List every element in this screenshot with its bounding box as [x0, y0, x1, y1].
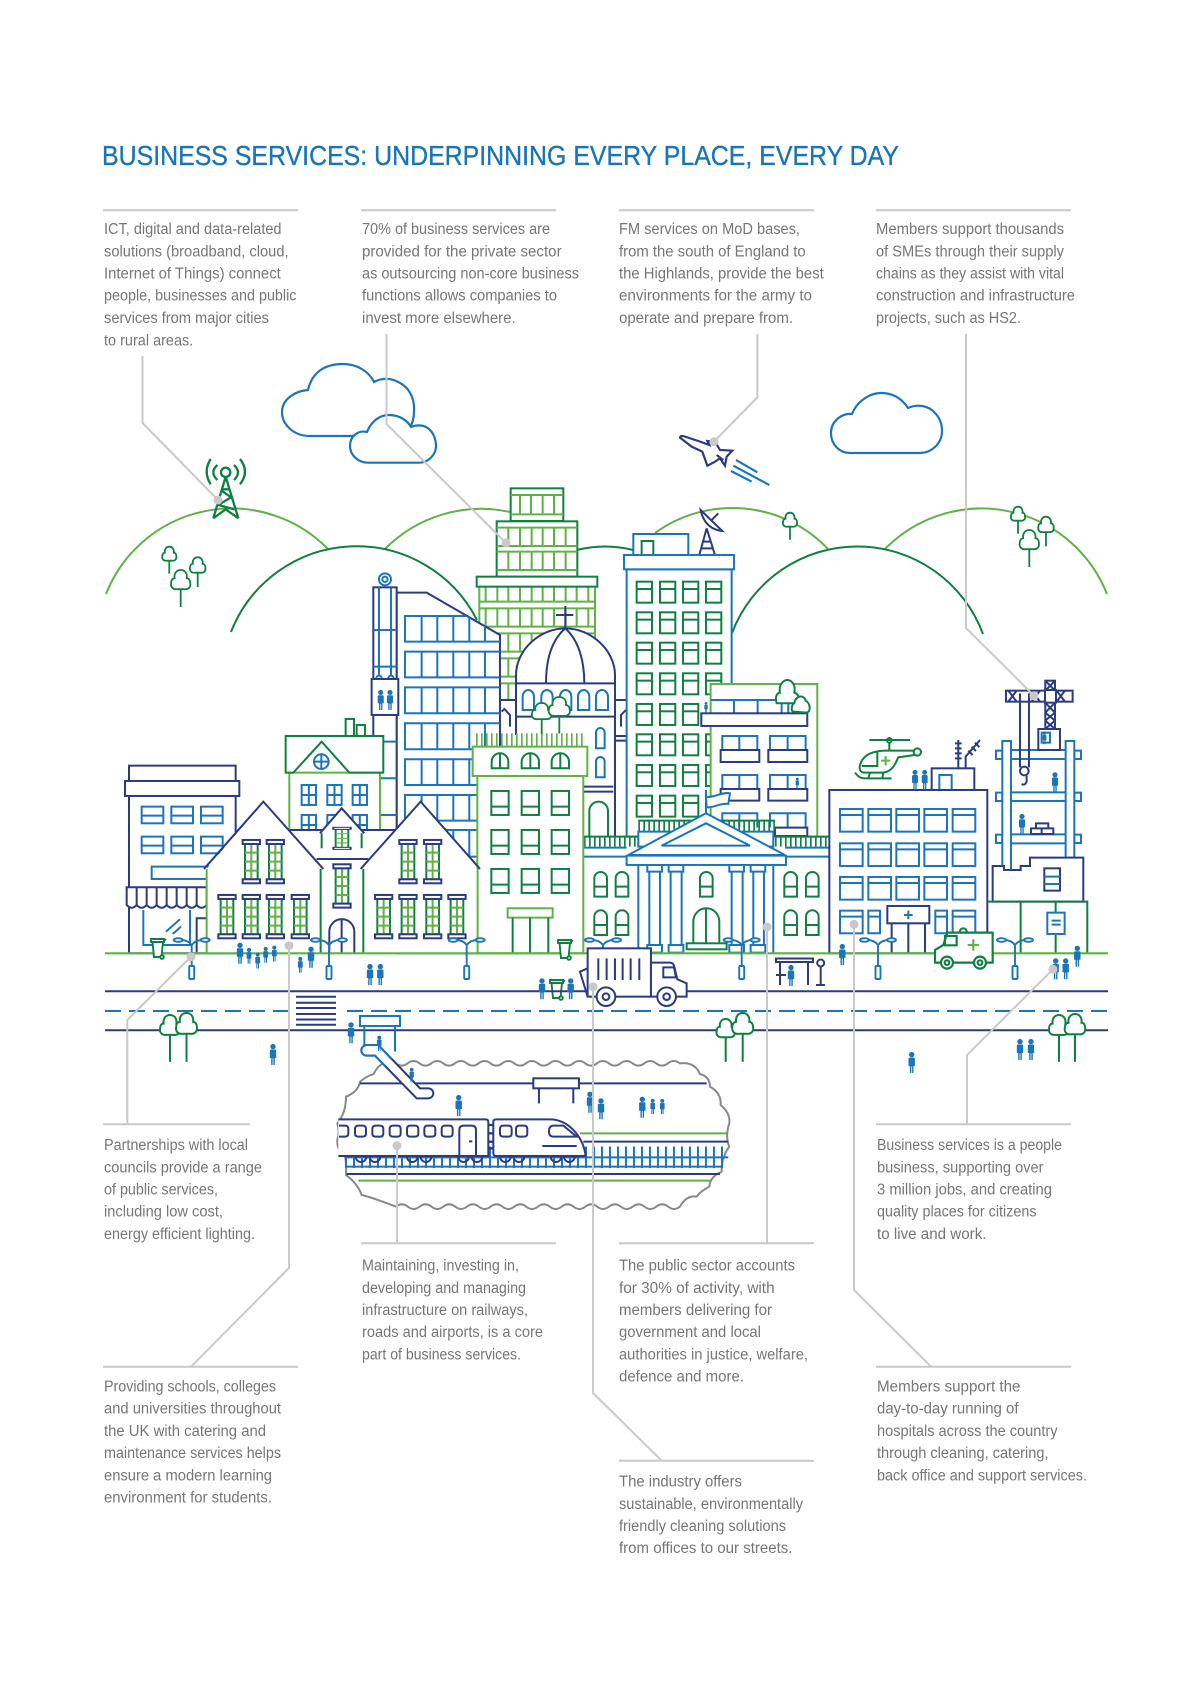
- bins: [151, 939, 573, 1000]
- callout: railways: [361, 1243, 556, 1363]
- callout: hospitals: Members support the: [877, 1379, 1020, 1396]
- domed building: [501, 606, 626, 837]
- callout: education: maintenance services helps: [104, 1445, 281, 1462]
- people: [237, 690, 1081, 1119]
- icon: plane: [680, 436, 769, 485]
- leader: lighting: [127, 952, 196, 1124]
- callout: cleaning: from offices to our streets.: [619, 1540, 792, 1557]
- hospital and construction site: [829, 681, 1087, 953]
- train: [338, 1119, 586, 1162]
- navy shop: [125, 766, 239, 953]
- ambulance: [935, 928, 993, 969]
- callout: cleaning: The industry offers: [619, 1474, 742, 1491]
- construction frame: [988, 681, 1087, 953]
- callout: lighting: of public services,: [104, 1182, 218, 1199]
- callout: defence: environments for the army to: [619, 288, 812, 305]
- callout: public sector: defence and more.: [619, 1368, 744, 1386]
- callout: railways: Maintaining, investing in,: [362, 1258, 519, 1275]
- hill trees: [162, 507, 1054, 607]
- callout: people: 3 million jobs, and creating: [877, 1182, 1052, 1199]
- callout: defence: operate and prepare from.: [619, 310, 793, 327]
- callout: construction: of SMEs through their supply: [876, 243, 1064, 260]
- callout: private sector: provided for the private sector: [362, 243, 562, 260]
- callout: connectivity: Internet of Things) connect: [104, 266, 281, 283]
- station canopy: [360, 1016, 400, 1052]
- callout: education: [103, 1367, 298, 1506]
- apartment block: [701, 680, 817, 837]
- callout: construction: [876, 210, 1075, 327]
- callout: public sector: The public sector accounts: [619, 1258, 795, 1275]
- street lamps: [174, 938, 1033, 979]
- callout: defence: [619, 210, 824, 327]
- bench: [533, 1078, 579, 1103]
- callout: public sector: authorities in justice, welfare,: [619, 1346, 808, 1363]
- infographic: [103, 146, 1108, 1553]
- gabled houses: [204, 802, 480, 953]
- platform: [360, 1080, 707, 1086]
- refuse truck: [580, 948, 687, 1006]
- callout: construction: Members support thousands: [876, 221, 1064, 238]
- hills: [106, 508, 1107, 634]
- leader: cleaning: [588, 982, 662, 1461]
- callout: public sector: for 30% of activity, with: [619, 1280, 775, 1297]
- bus shelter: [776, 958, 825, 985]
- callout: construction: chains as they assist with vital: [876, 266, 1064, 283]
- rooftop trees: [532, 697, 570, 734]
- callout: public sector: government and local: [619, 1324, 761, 1341]
- callout: public sector: members delivering for: [619, 1302, 772, 1319]
- callout: railways: infrastructure on railways,: [362, 1302, 528, 1319]
- road: [105, 991, 1108, 1030]
- ground line: [105, 952, 1108, 954]
- leader: education: [191, 941, 294, 1367]
- callout: people: to live and work.: [877, 1226, 986, 1243]
- leader: construction: [966, 334, 1038, 700]
- front green block: [473, 740, 587, 953]
- leader: people: [967, 965, 1058, 1124]
- callout: connectivity: to rural areas.: [104, 332, 193, 349]
- callout: hospitals: through cleaning, catering,: [877, 1445, 1048, 1462]
- callout: hospitals: back office and support services.: [877, 1467, 1087, 1484]
- helicopter: [855, 738, 921, 778]
- clouds: [282, 364, 942, 463]
- callout: lighting: energy efficient lighting.: [104, 1226, 255, 1243]
- callout: connectivity: ICT, digital and data-related: [104, 221, 282, 238]
- callout: cleaning: [619, 1461, 814, 1557]
- callout: people: business, supporting over: [877, 1159, 1044, 1176]
- callout: education: ensure a modern learning: [104, 1467, 272, 1484]
- callout: cleaning: sustainable, environmentally: [619, 1496, 803, 1513]
- callout: hospitals: day-to-day running of: [877, 1401, 1019, 1418]
- callout: people: [876, 1124, 1071, 1243]
- callout: connectivity: services from major cities: [104, 310, 269, 327]
- callout: lighting: councils provide a range: [104, 1159, 262, 1176]
- blue office and lift tower: [372, 573, 503, 953]
- callout: connectivity: [103, 210, 298, 349]
- title: BUSINESS SERVICES: UNDERPINNING EVERY PLACE, EVERY DAY: [102, 140, 899, 171]
- leader: hospitals: [850, 920, 931, 1367]
- palace: [584, 790, 829, 953]
- callout: private sector: functions allows companies to: [362, 288, 557, 305]
- callout: railways: developing and managing: [362, 1280, 526, 1297]
- road trees: [160, 1013, 1085, 1062]
- callout: defence: from the south of England to: [619, 243, 806, 260]
- callout: construction: construction and infrastructure: [876, 288, 1075, 305]
- underground station: [337, 1016, 729, 1209]
- green house: [286, 719, 383, 839]
- callout: lighting: Partnerships with local: [104, 1137, 248, 1154]
- tracks: [345, 1133, 728, 1181]
- callout: education: and universities throughout: [104, 1401, 282, 1418]
- escalator: [361, 1045, 433, 1098]
- callout: education: the UK with catering and: [104, 1423, 266, 1440]
- callout: education: Providing schools, colleges: [104, 1379, 276, 1396]
- callout: people: quality places for citizens: [877, 1204, 1037, 1221]
- callout: people: Business services is a people: [877, 1137, 1062, 1154]
- callout: construction: projects, such as HS2.: [876, 310, 1021, 327]
- callout: private sector: as outsourcing non-core business: [362, 266, 579, 283]
- callout: defence: FM services on MoD bases,: [619, 221, 800, 238]
- callout: education: environment for students.: [104, 1489, 272, 1506]
- leader: connectivity: [142, 356, 222, 504]
- leader: railways: [392, 1141, 402, 1243]
- green tower: [477, 488, 597, 700]
- callout: public sector: [619, 1243, 814, 1386]
- callout: lighting: including low cost,: [104, 1204, 223, 1221]
- leader: public sector: [762, 922, 772, 1243]
- callout: private sector: invest more elsewhere.: [362, 310, 516, 327]
- tall blue tower: [624, 510, 734, 837]
- callout: private sector: [361, 210, 579, 327]
- callout: railways: roads and airports, is a core: [362, 1324, 543, 1341]
- callout: railways: part of business services.: [362, 1346, 521, 1363]
- leader: private sector: [386, 334, 510, 548]
- callout: connectivity: solutions (broadband, cloud,: [104, 243, 289, 260]
- leader: defence: [710, 334, 757, 446]
- icon: signal tower: [207, 459, 245, 518]
- callout: cleaning: friendly cleaning solutions: [619, 1518, 786, 1535]
- callout: defence: the Highlands, provide the best: [619, 266, 824, 283]
- callout: lighting: [103, 1124, 262, 1243]
- callout: private sector: 70% of business services are: [362, 221, 550, 238]
- tunnel outline: [337, 1061, 729, 1209]
- callout: hospitals: hospitals across the country: [877, 1423, 1058, 1440]
- callout: connectivity: people, businesses and public: [104, 288, 297, 305]
- callout: hospitals: [876, 1367, 1087, 1484]
